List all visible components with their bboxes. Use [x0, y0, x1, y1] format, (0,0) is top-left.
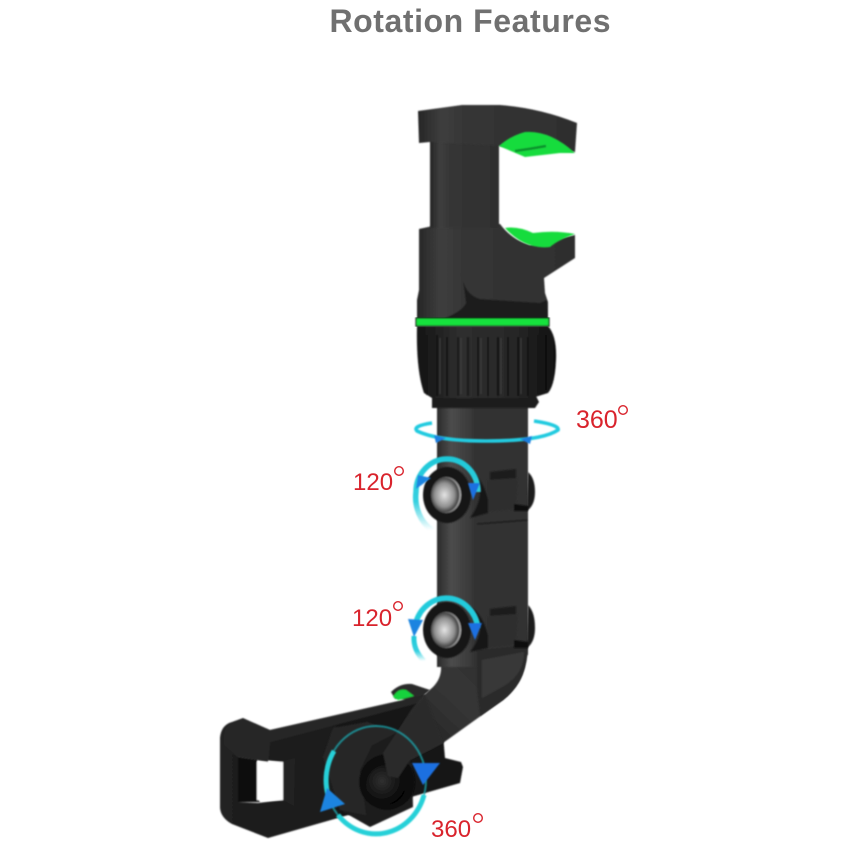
- neck: [430, 140, 499, 228]
- green ring: [416, 318, 549, 326]
- arm: [383, 640, 528, 776]
- label: 120 lower: 120: [352, 605, 392, 632]
- rivet: lower: [423, 602, 471, 658]
- rear bracket: [220, 684, 463, 838]
- stem: [437, 405, 528, 716]
- arrow: lower 120 rotation: [408, 598, 482, 661]
- label: 360 top: 360: [576, 406, 618, 434]
- title: Rotation Features: [330, 3, 610, 39]
- nut and ball joint: [323, 695, 443, 827]
- hinge: lower: [470, 605, 535, 652]
- label: 120 upper: 120: [353, 469, 393, 496]
- upper clamp head: [418, 105, 577, 152]
- lower clamp head: [417, 224, 575, 320]
- upper knob: [417, 326, 556, 408]
- hinge: upper: [470, 469, 535, 518]
- label: 360 bottom: 360: [431, 816, 471, 843]
- green grip: upper: [499, 132, 575, 157]
- rivet: upper: [423, 467, 471, 523]
- green grip: lower: [505, 228, 575, 247]
- arrow: upper 120 rotation: [416, 459, 480, 530]
- product: phone holder: [220, 105, 577, 838]
- arrow: bottom 360 rotation: [320, 726, 440, 834]
- arrow: top 360 rotation: [416, 421, 558, 444]
